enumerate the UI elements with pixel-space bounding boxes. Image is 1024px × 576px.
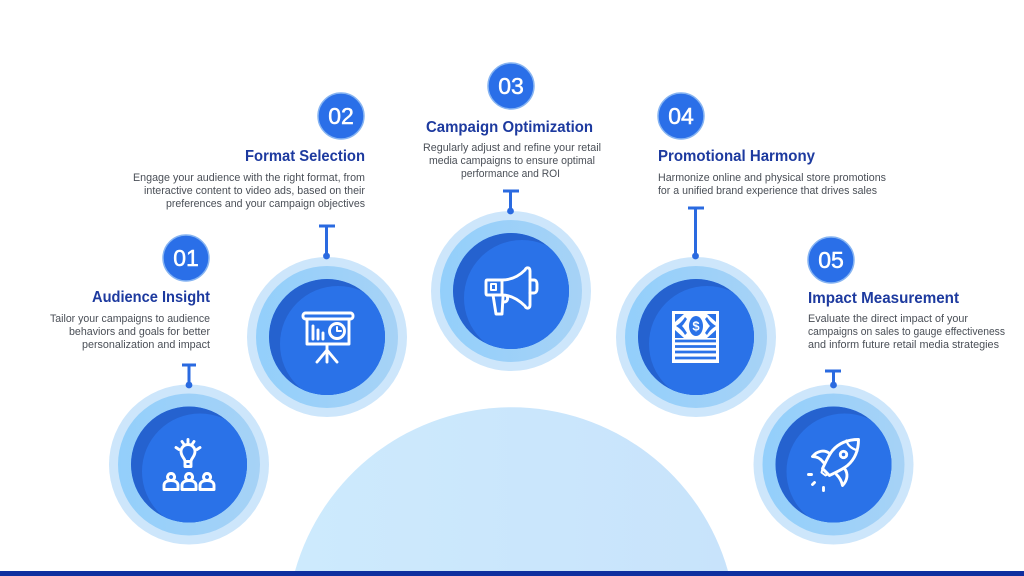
description 05	[808, 313, 1006, 351]
number badge 03	[488, 63, 534, 109]
connector 01	[182, 365, 196, 388]
step 01: audience insight	[50, 235, 269, 544]
description 02: interactive content to video ads, based on their	[144, 185, 365, 197]
step 04: promotional harmony	[616, 93, 887, 417]
description 05: Evaluate the direct impact of your	[808, 313, 968, 325]
description 04: Harmonize online and physical store promotions	[658, 172, 887, 184]
description 01: Tailor your campaigns to audience	[50, 313, 210, 325]
number badge 04	[658, 93, 704, 139]
description 05: and inform future retail media strategies	[808, 339, 1000, 351]
connector 03	[503, 191, 519, 214]
number badge 04: 04	[668, 103, 694, 129]
heading 05: Impact Measurement	[808, 290, 960, 307]
icon: rocket	[808, 440, 858, 490]
step 03: campaign optimization	[423, 63, 601, 371]
description 02	[133, 172, 366, 210]
step 02: format selection	[133, 93, 407, 417]
icon: megaphone	[486, 268, 537, 314]
description 03: Regularly adjust and refine your retail	[423, 142, 601, 154]
heading 03: Campaign Optimization	[426, 119, 593, 136]
number badge 05: 05	[818, 247, 844, 273]
description 02: Engage your audience with the right format, from	[133, 172, 365, 184]
description 04: for a unified brand experience that drives sales	[658, 185, 878, 197]
number badge 05	[808, 237, 854, 283]
description 04	[658, 172, 887, 197]
bottom bar	[0, 571, 1024, 576]
description 01: personalization and impact	[82, 339, 210, 351]
description 03: media campaigns to ensure optimal	[429, 155, 595, 167]
circle 01 with icon	[109, 384, 269, 544]
heading 04: Promotional Harmony	[658, 148, 815, 165]
description 03: performance and ROI	[461, 168, 560, 180]
description 01: behaviors and goals for better	[69, 326, 210, 338]
number badge 02: 02	[328, 103, 354, 129]
number badge 02	[318, 93, 364, 139]
icon: presentation board	[303, 313, 353, 362]
step 05: impact measurement	[754, 237, 1006, 544]
circle 03 with icon	[431, 211, 591, 371]
description 03	[423, 142, 601, 180]
circle 05 with icon	[754, 384, 914, 544]
heading 02: Format Selection	[245, 148, 365, 165]
number badge 01: 01	[173, 245, 199, 271]
icon: banknote stack	[672, 311, 719, 363]
icon: banknote stack: $	[692, 318, 700, 334]
description 01	[50, 313, 210, 351]
connector 04	[688, 208, 704, 259]
description 05: campaigns on sales to gauge effectiveness	[808, 326, 1006, 338]
circle 04 with icon	[616, 257, 776, 417]
number badge 01	[163, 235, 209, 281]
connector 02	[319, 226, 335, 259]
icon: lightbulb and people	[164, 440, 214, 490]
connector 05	[825, 371, 841, 388]
heading 01: Audience Insight	[92, 289, 211, 306]
background semicircle	[295, 407, 728, 571]
description 02: preferences and your campaign objectives	[166, 198, 366, 210]
number badge 03: 03	[498, 73, 524, 99]
circle 02 with icon	[247, 257, 407, 417]
